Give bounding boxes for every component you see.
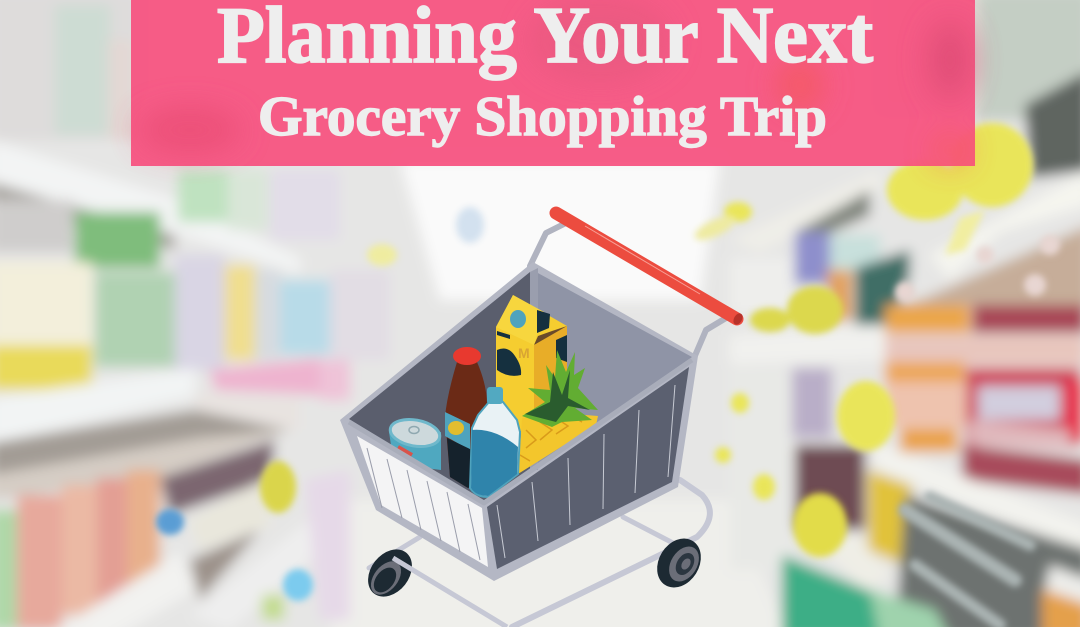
cart undercarriage (369, 480, 710, 627)
milk carton: M (518, 345, 530, 361)
cola bottle (445, 347, 487, 488)
pink label highlights on red shelves (895, 235, 1060, 302)
pineapple (518, 350, 598, 474)
title banner (131, 0, 975, 166)
shelf highlights in the dark right corner (905, 497, 1030, 625)
soda can (388, 416, 442, 470)
title line 2: Grocery Shopping Trip (258, 86, 827, 148)
milk carton (496, 295, 567, 440)
right wheel (648, 530, 710, 596)
top right (975, 0, 1080, 120)
top left (0, 0, 140, 140)
yellow and green products (0, 262, 92, 347)
handle arms (530, 223, 726, 358)
left white panel (357, 436, 488, 567)
front rim (349, 360, 692, 503)
banner tint blotches (140, 0, 970, 162)
right middle (730, 258, 792, 313)
left shelf 1 (0, 140, 300, 274)
right dark panel (487, 367, 689, 569)
front left rail (393, 558, 507, 627)
cart frame (340, 262, 698, 581)
red handle (556, 213, 744, 326)
lower left shelves (190, 480, 270, 550)
water bottle (470, 387, 520, 497)
right lower (730, 370, 792, 570)
left wheel (359, 541, 421, 605)
left shelf 2 (0, 368, 195, 443)
basket interior (349, 268, 692, 502)
red products (0, 510, 17, 627)
shopping cart illustration (340, 213, 744, 627)
